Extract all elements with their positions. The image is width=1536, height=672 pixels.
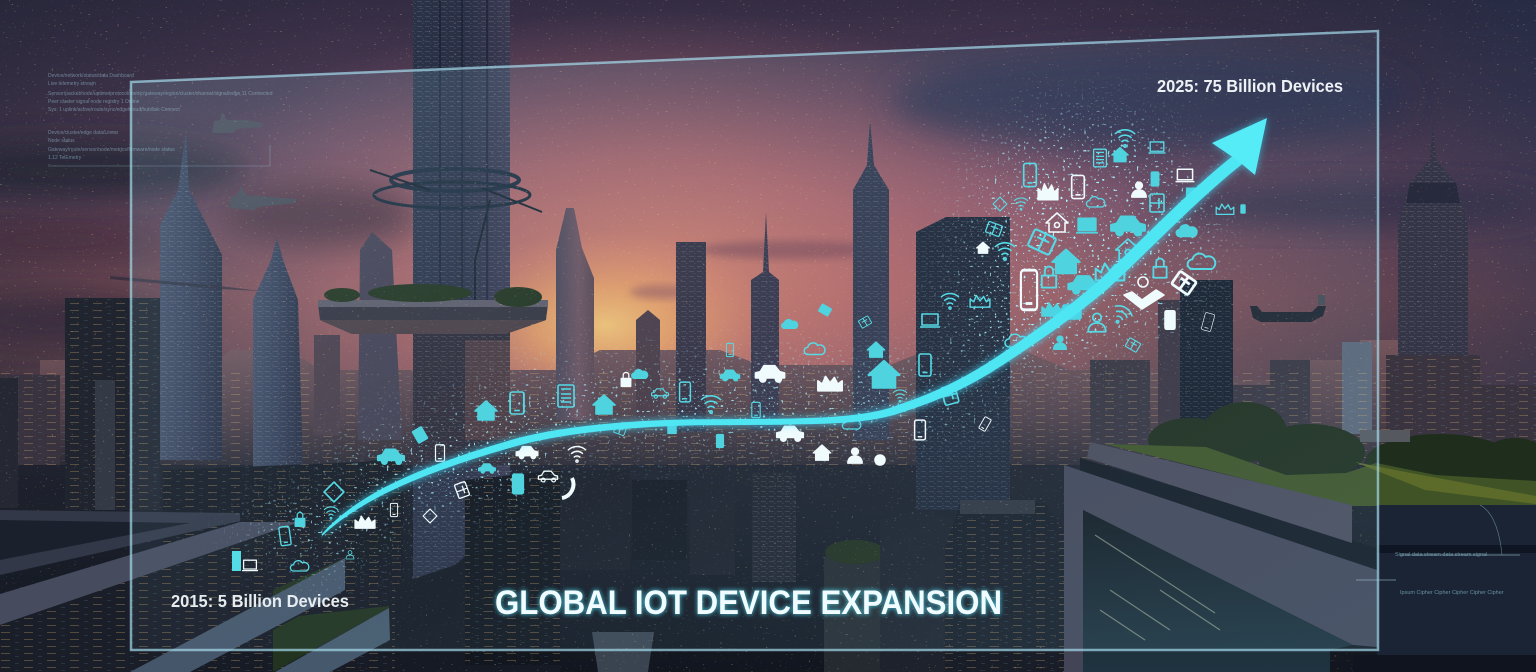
start label: 2015: 5 Billion Devices: [171, 591, 349, 611]
faint HUD data readout, top left: Device/cluster/edge data/Linear: [48, 130, 119, 136]
faint HUD data readout, top left: Node status: [48, 138, 75, 144]
central foreground tower with platform: [318, 0, 548, 590]
title: GLOBAL IOT DEVICE EXPANSION: [495, 584, 1002, 622]
faint HUD data readout, top left: Device/network/status/data Dashboard: [48, 73, 134, 79]
right landmark tower: [1386, 121, 1480, 465]
left foreground rooftops: [0, 510, 390, 672]
icons along growth curve: late section: [941, 130, 1245, 352]
faint HUD data readout, top left: Live telemetry stream: [48, 81, 96, 87]
faint HUD data readout, top left: Peer cluster signal node registry 1 Online: [48, 99, 140, 105]
flying drones: [110, 112, 1326, 322]
icons along growth curve: middle section: [720, 304, 991, 465]
faint HUD data readout, bottom right: Ipsum Cipher Cipher Cipher Cipher Cipher: [1400, 590, 1504, 596]
growth curve arrow: [322, 118, 1267, 535]
faint HUD data readout, bottom right: Signal data stream data stream signal: [1395, 552, 1487, 558]
glass panel: [131, 31, 1378, 650]
faint HUD data readout, top left: 1.12 TelEmetry: [48, 155, 82, 161]
faint HUD data readout, top left: [48, 73, 273, 166]
icons along growth curve: early section: [232, 370, 760, 571]
right foreground rooftop building: [1064, 402, 1536, 672]
midground skyscrapers: [0, 120, 1233, 510]
end label: 2025: 75 Billion Devices: [1157, 76, 1343, 96]
faint HUD data readout, top left: Gateway/route/sensor/node/metrics/firmware/node status: [48, 147, 175, 153]
faint HUD data readout, top left: Sensor/packet/node/uptime/protocol/metric/gateway/region/cluster/channel/signal/edge 11 Connected: [48, 91, 273, 97]
midground dark office blocks: [163, 457, 1070, 672]
faint HUD data readout, top left: Sys: 1 uplink/active/route/sync/edge/cloud/hub/link Connect: [48, 107, 180, 113]
particle dust around the curve: [214, 76, 1250, 608]
faint HUD data readout, bottom right: [1356, 505, 1520, 596]
distant city skyline: [0, 340, 1536, 672]
ground level city: [0, 465, 1536, 672]
title glow: GLOBAL IOT DEVICE EXPANSION: [495, 584, 1002, 622]
